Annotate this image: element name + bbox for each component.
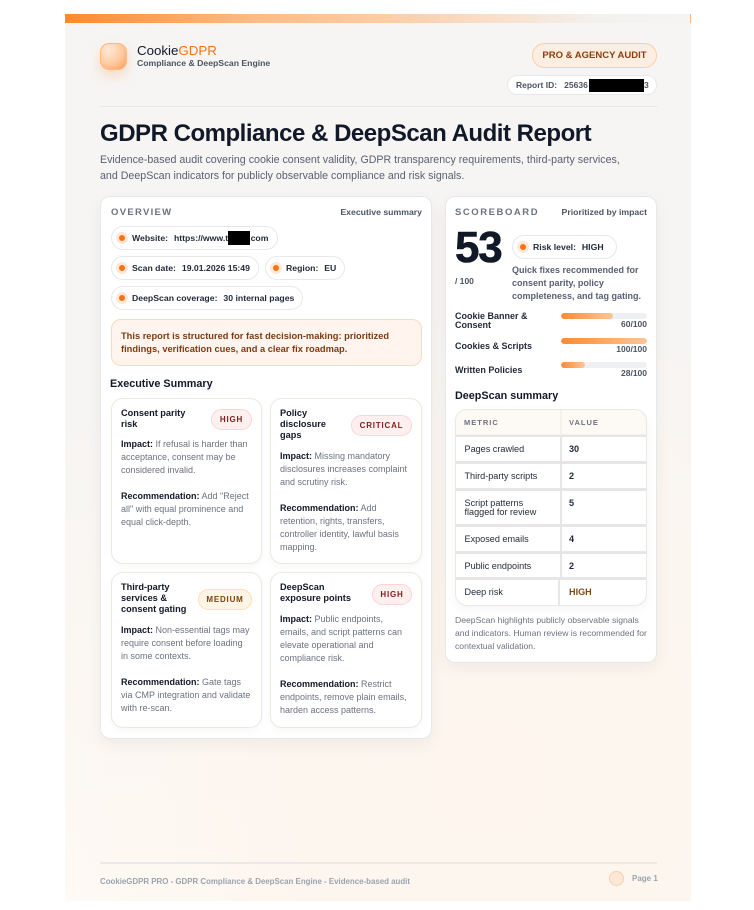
- header row background: [456, 410, 646, 435]
- score bar: [561, 338, 647, 344]
- finding text: endpoints, remove plain emails,: [280, 692, 407, 702]
- icon: logo: [100, 43, 127, 70]
- score number: 53: [455, 223, 502, 272]
- value: 2: [569, 471, 574, 481]
- row: third-party scripts: Third-party scripts: [464, 471, 537, 481]
- finding: third-party services: [111, 572, 262, 728]
- deepscan summary heading: DeepScan summary: [455, 390, 558, 402]
- overview side label: Executive summary: [340, 207, 422, 217]
- value: 4: [569, 534, 574, 544]
- main title: GDPR Compliance & DeepScan Audit Report: [100, 120, 591, 147]
- row: exposed emails: Exposed emails: [464, 534, 529, 544]
- finding text: require consent before loading: [121, 638, 243, 648]
- table header: value: VALUE: [569, 418, 599, 427]
- panel: scoreboard: [445, 196, 657, 663]
- severity tag: HIGH: [220, 415, 243, 424]
- audit badge: PRO & AGENCY AUDIT: [542, 50, 647, 61]
- row: script patterns: Script patterns: [464, 498, 523, 508]
- row: script patterns: flagged for review: [464, 507, 536, 517]
- row: pages crawled: Pages crawled: [464, 444, 524, 454]
- pill: scan date: [111, 256, 259, 280]
- value: 2: [569, 561, 574, 571]
- value: [562, 437, 646, 461]
- icon: footer dot: [609, 871, 624, 886]
- panel: overview: [100, 196, 432, 739]
- quick fixes note: completeness, and tag gating.: [512, 291, 641, 301]
- finding text: via CMP integration and validate: [121, 690, 250, 700]
- row: third-party scripts: [456, 464, 560, 488]
- pill: risk level: Risk level: HIGH: [533, 242, 604, 252]
- pill: website: [111, 226, 278, 250]
- value: [562, 554, 646, 577]
- score label: Cookie Banner &: [455, 311, 528, 321]
- value: HIGH: [569, 587, 592, 597]
- severity tag: CRITICAL: [360, 421, 403, 430]
- callout: This report is structured for fast decision-making: prioritized: [121, 331, 389, 341]
- severity tag: [198, 589, 252, 610]
- severity tag: [211, 409, 252, 430]
- pill: region: Region: EU: [286, 263, 336, 273]
- row: script patterns: [456, 491, 560, 524]
- finding text: considered invalid.: [121, 465, 196, 475]
- value: 5: [569, 498, 574, 508]
- severity tag: MEDIUM: [206, 595, 244, 604]
- subtitle: [100, 154, 620, 182]
- value: [560, 580, 646, 606]
- finding text: Recommendation: Add "Reject: [121, 491, 249, 501]
- score label: [455, 311, 528, 330]
- finding title: services &: [121, 593, 167, 603]
- finding title: [280, 408, 326, 440]
- finding text: Impact: Non-essential tags may: [121, 625, 250, 635]
- pill: website: Website: https://www.t .com: [132, 233, 268, 243]
- finding title: consent gating: [121, 604, 186, 614]
- finding title: [121, 408, 186, 429]
- value: [562, 464, 646, 488]
- finding text: compliance risk.: [280, 653, 345, 663]
- footer divider: [100, 862, 657, 864]
- finding text: and scrutiny risk.: [280, 477, 348, 487]
- pill: region: [265, 256, 345, 280]
- finding title: risk: [121, 419, 137, 429]
- score label: Cookies & Scripts: [455, 341, 532, 351]
- finding text: elevate operational and: [280, 640, 374, 650]
- header divider: [100, 106, 657, 107]
- score bar: [561, 362, 647, 368]
- value: 30: [569, 444, 579, 454]
- finding text: all" with equal prominence and: [121, 504, 243, 514]
- finding text: mapping.: [280, 542, 317, 552]
- brand name: CookieGDPR: [137, 43, 217, 58]
- finding title: DeepScan: [280, 582, 324, 592]
- value: [562, 491, 646, 524]
- finding text: harden access patterns.: [280, 705, 376, 715]
- finding: deepscan exposure points: [270, 572, 422, 728]
- row: public endpoints: Public endpoints: [464, 561, 531, 571]
- row: public endpoints: [456, 554, 560, 577]
- finding text: controller identity, lawful basis: [280, 529, 399, 539]
- finding text: retention, rights, transfers,: [280, 516, 385, 526]
- quick fixes note: Quick fixes recommended for: [512, 265, 639, 275]
- scoreboard side label: Prioritized by impact: [562, 207, 647, 217]
- scoreboard heading: SCOREBOARD: [455, 207, 539, 218]
- quick fixes note: consent parity, policy: [512, 278, 604, 288]
- finding text: equal click-depth.: [121, 517, 191, 527]
- finding text: Recommendation: Add: [280, 503, 377, 513]
- bar end mark: [690, 14, 691, 23]
- executive summary heading: Executive Summary: [110, 378, 213, 390]
- quick fixes note: [512, 265, 641, 301]
- finding text: Impact: Missing mandatory: [280, 451, 390, 461]
- finding text: Recommendation: Restrict: [280, 679, 392, 689]
- finding title: Third-party: [121, 582, 170, 592]
- audit badge: [532, 43, 657, 68]
- finding text: [280, 451, 407, 552]
- finding text: emails, and script patterns can: [280, 627, 402, 637]
- callout: [111, 319, 422, 366]
- severity tag: [351, 415, 412, 436]
- brand header: [95, 43, 270, 81]
- table: deepscan metrics: [455, 409, 647, 606]
- finding text: in some contexts.: [121, 651, 191, 661]
- row: deep risk: [456, 580, 558, 606]
- finding text: with re-scan.: [121, 703, 172, 713]
- subtitle: and DeepScan indicators for publicly observable compliance and risk signals.: [100, 170, 464, 182]
- finding text: [121, 625, 250, 713]
- page number: Page 1: [632, 874, 658, 883]
- pill: scan date: Scan date: 19.01.2026 15:49: [132, 263, 250, 273]
- row: pages crawled: [456, 437, 560, 461]
- score value: 60/100: [621, 319, 647, 329]
- score denominator: / 100: [455, 276, 474, 286]
- score label: Consent: [455, 320, 491, 330]
- finding: policy disclosure gaps: [270, 398, 422, 564]
- top accent bar: [65, 14, 691, 23]
- callout: findings, verification cues, and a clear fix roadmap.: [121, 344, 347, 354]
- value: [562, 527, 646, 551]
- row: deep risk: Deep risk: [464, 587, 503, 597]
- row: exposed emails: [456, 527, 560, 551]
- pill: risk level: [512, 235, 617, 259]
- deepscan note: and indicators. Human review is recommended for: [455, 628, 647, 638]
- table header: metric: METRIC: [464, 418, 499, 427]
- score value: 100/100: [616, 344, 647, 354]
- score bar: [561, 313, 647, 319]
- finding title: disclosure: [280, 419, 326, 429]
- finding title: Policy: [280, 408, 307, 418]
- severity tag: [372, 584, 412, 605]
- score value: 28/100: [621, 368, 647, 378]
- pill: coverage: DeepScan coverage: 30 internal pages: [132, 293, 294, 303]
- deepscan note: contextual validation.: [455, 641, 535, 651]
- finding title: exposure points: [280, 593, 351, 603]
- finding text: [121, 439, 249, 527]
- pill: coverage: [111, 286, 303, 310]
- report id pill: Report ID: 25636: [516, 80, 588, 90]
- subtitle: Evidence-based audit covering cookie consent validity, GDPR transparency requirements, third-party services,: [100, 154, 620, 166]
- finding text: [280, 614, 407, 715]
- finding title: [121, 582, 186, 614]
- report id pill: [507, 75, 657, 95]
- finding title: [280, 582, 351, 603]
- overview heading: OVERVIEW: [111, 207, 172, 218]
- table header: metric: [456, 410, 560, 434]
- table header: value: [562, 410, 646, 434]
- footer text: CookieGDPR PRO - GDPR Compliance & DeepScan Engine - Evidence-based audit: [100, 877, 410, 886]
- report id pill: 3: [644, 80, 649, 90]
- deepscan note: [455, 615, 647, 651]
- finding text: Impact: Public endpoints,: [280, 614, 383, 624]
- finding: consent parity risk: [111, 398, 262, 564]
- finding title: gaps: [280, 430, 301, 440]
- finding text: Impact: If refusal is harder than: [121, 439, 248, 449]
- severity tag: HIGH: [380, 590, 404, 599]
- score label: Written Policies: [455, 365, 522, 375]
- brand tagline: Compliance & DeepScan Engine: [137, 58, 270, 68]
- finding text: Recommendation: Gate tags: [121, 677, 241, 687]
- finding text: disclosures increases complaint: [280, 464, 407, 474]
- finding text: acceptance, consent may be: [121, 452, 236, 462]
- deepscan note: DeepScan highlights publicly observable signals: [455, 615, 639, 625]
- finding title: Consent parity: [121, 408, 185, 418]
